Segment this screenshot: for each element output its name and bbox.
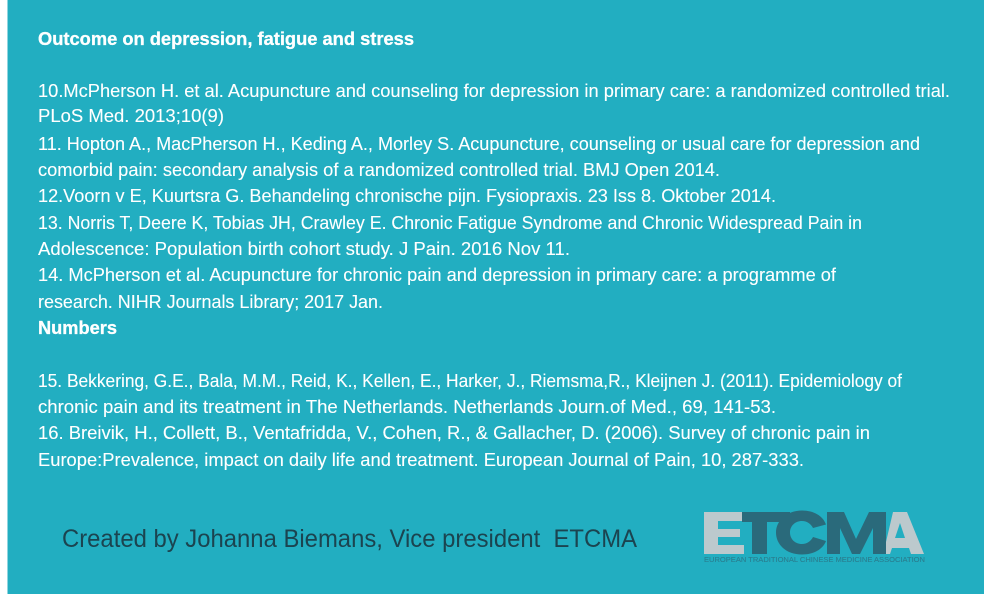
text block: references 10 to 14: Adolescence: Population birth cohort study. J Pain. 2016 Nov 11. <box>38 239 570 259</box>
text block: references 10 to 14: 11. Hopton A., MacPherson H., Keding A., Morley S. Acupuncture, counseling or usual care for depression and <box>38 134 920 154</box>
text block: references 15 and 16: 16. Breivik, H., Collett, B., Ventafridda, V., Cohen, R., & Gallacher, D. (2006). Survey of chronic pain in <box>38 423 870 443</box>
text block: references 15 and 16: chronic pain and its treatment in The Netherlands. Netherlands Journ.of Med., 69, 141-53. <box>38 397 776 417</box>
text block: references 15 and 16: 15. Bekkering, G.E., Bala, M.M., Reid, K., Kellen, E., Harker, J., Riemsma,R., Kleijnen J. (2011). Epidemiology of <box>38 371 903 391</box>
text block: references 10 to 14: 12.Voorn v E, Kuurtsra G. Behandeling chronische pijn. Fysiopraxis. 23 Iss 8. Oktober 2014. <box>38 186 776 206</box>
heading: outcome on depression, fatigue and stress: Outcome on depression, fatigue and stress <box>38 29 414 49</box>
logo: ETCMA <box>704 510 925 564</box>
heading: numbers: Numbers <box>38 318 117 338</box>
logo letter E <box>704 512 744 554</box>
logo tagline: EUROPEAN TRADITIONAL CHINESE MEDICINE ASSOCIATION <box>704 555 925 564</box>
logo letter A <box>886 512 924 554</box>
text block: references 10 to 14: 13. Norris T, Deere K, Tobias JH, Crawley E. Chronic Fatigue Syndrome and Chronic Widespread Pain in <box>38 213 862 233</box>
credit line: Created by Johanna Biemans, Vice president ETCMA <box>62 525 637 553</box>
text block: references 10 to 14: 14. McPherson et al. Acupuncture for chronic pain and depression in primary care: a programme of <box>38 265 837 285</box>
logo letter T <box>742 512 790 554</box>
text block: references 15 and 16: Europe:Prevalence, impact on daily life and treatment. European Journal of Pain, 10, 287-333. <box>38 450 804 470</box>
logo letter C <box>776 510 826 554</box>
text block: references 10 to 14: 10.McPherson H. et al. Acupuncture and counseling for depression in primary care: a randomized controlled trial. <box>38 81 950 101</box>
logo letter M <box>827 512 886 554</box>
text block: references 10 to 14: comorbid pain: secondary analysis of a randomized controlled trial. BMJ Open 2014. <box>38 160 720 180</box>
text block: references 15 and 16 <box>38 371 903 470</box>
text block: references 10 to 14 <box>38 81 950 312</box>
text block: references 10 to 14: PLoS Med. 2013;10(9) <box>38 106 224 126</box>
text block: references 10 to 14: research. NIHR Journals Library; 2017 Jan. <box>38 292 383 312</box>
